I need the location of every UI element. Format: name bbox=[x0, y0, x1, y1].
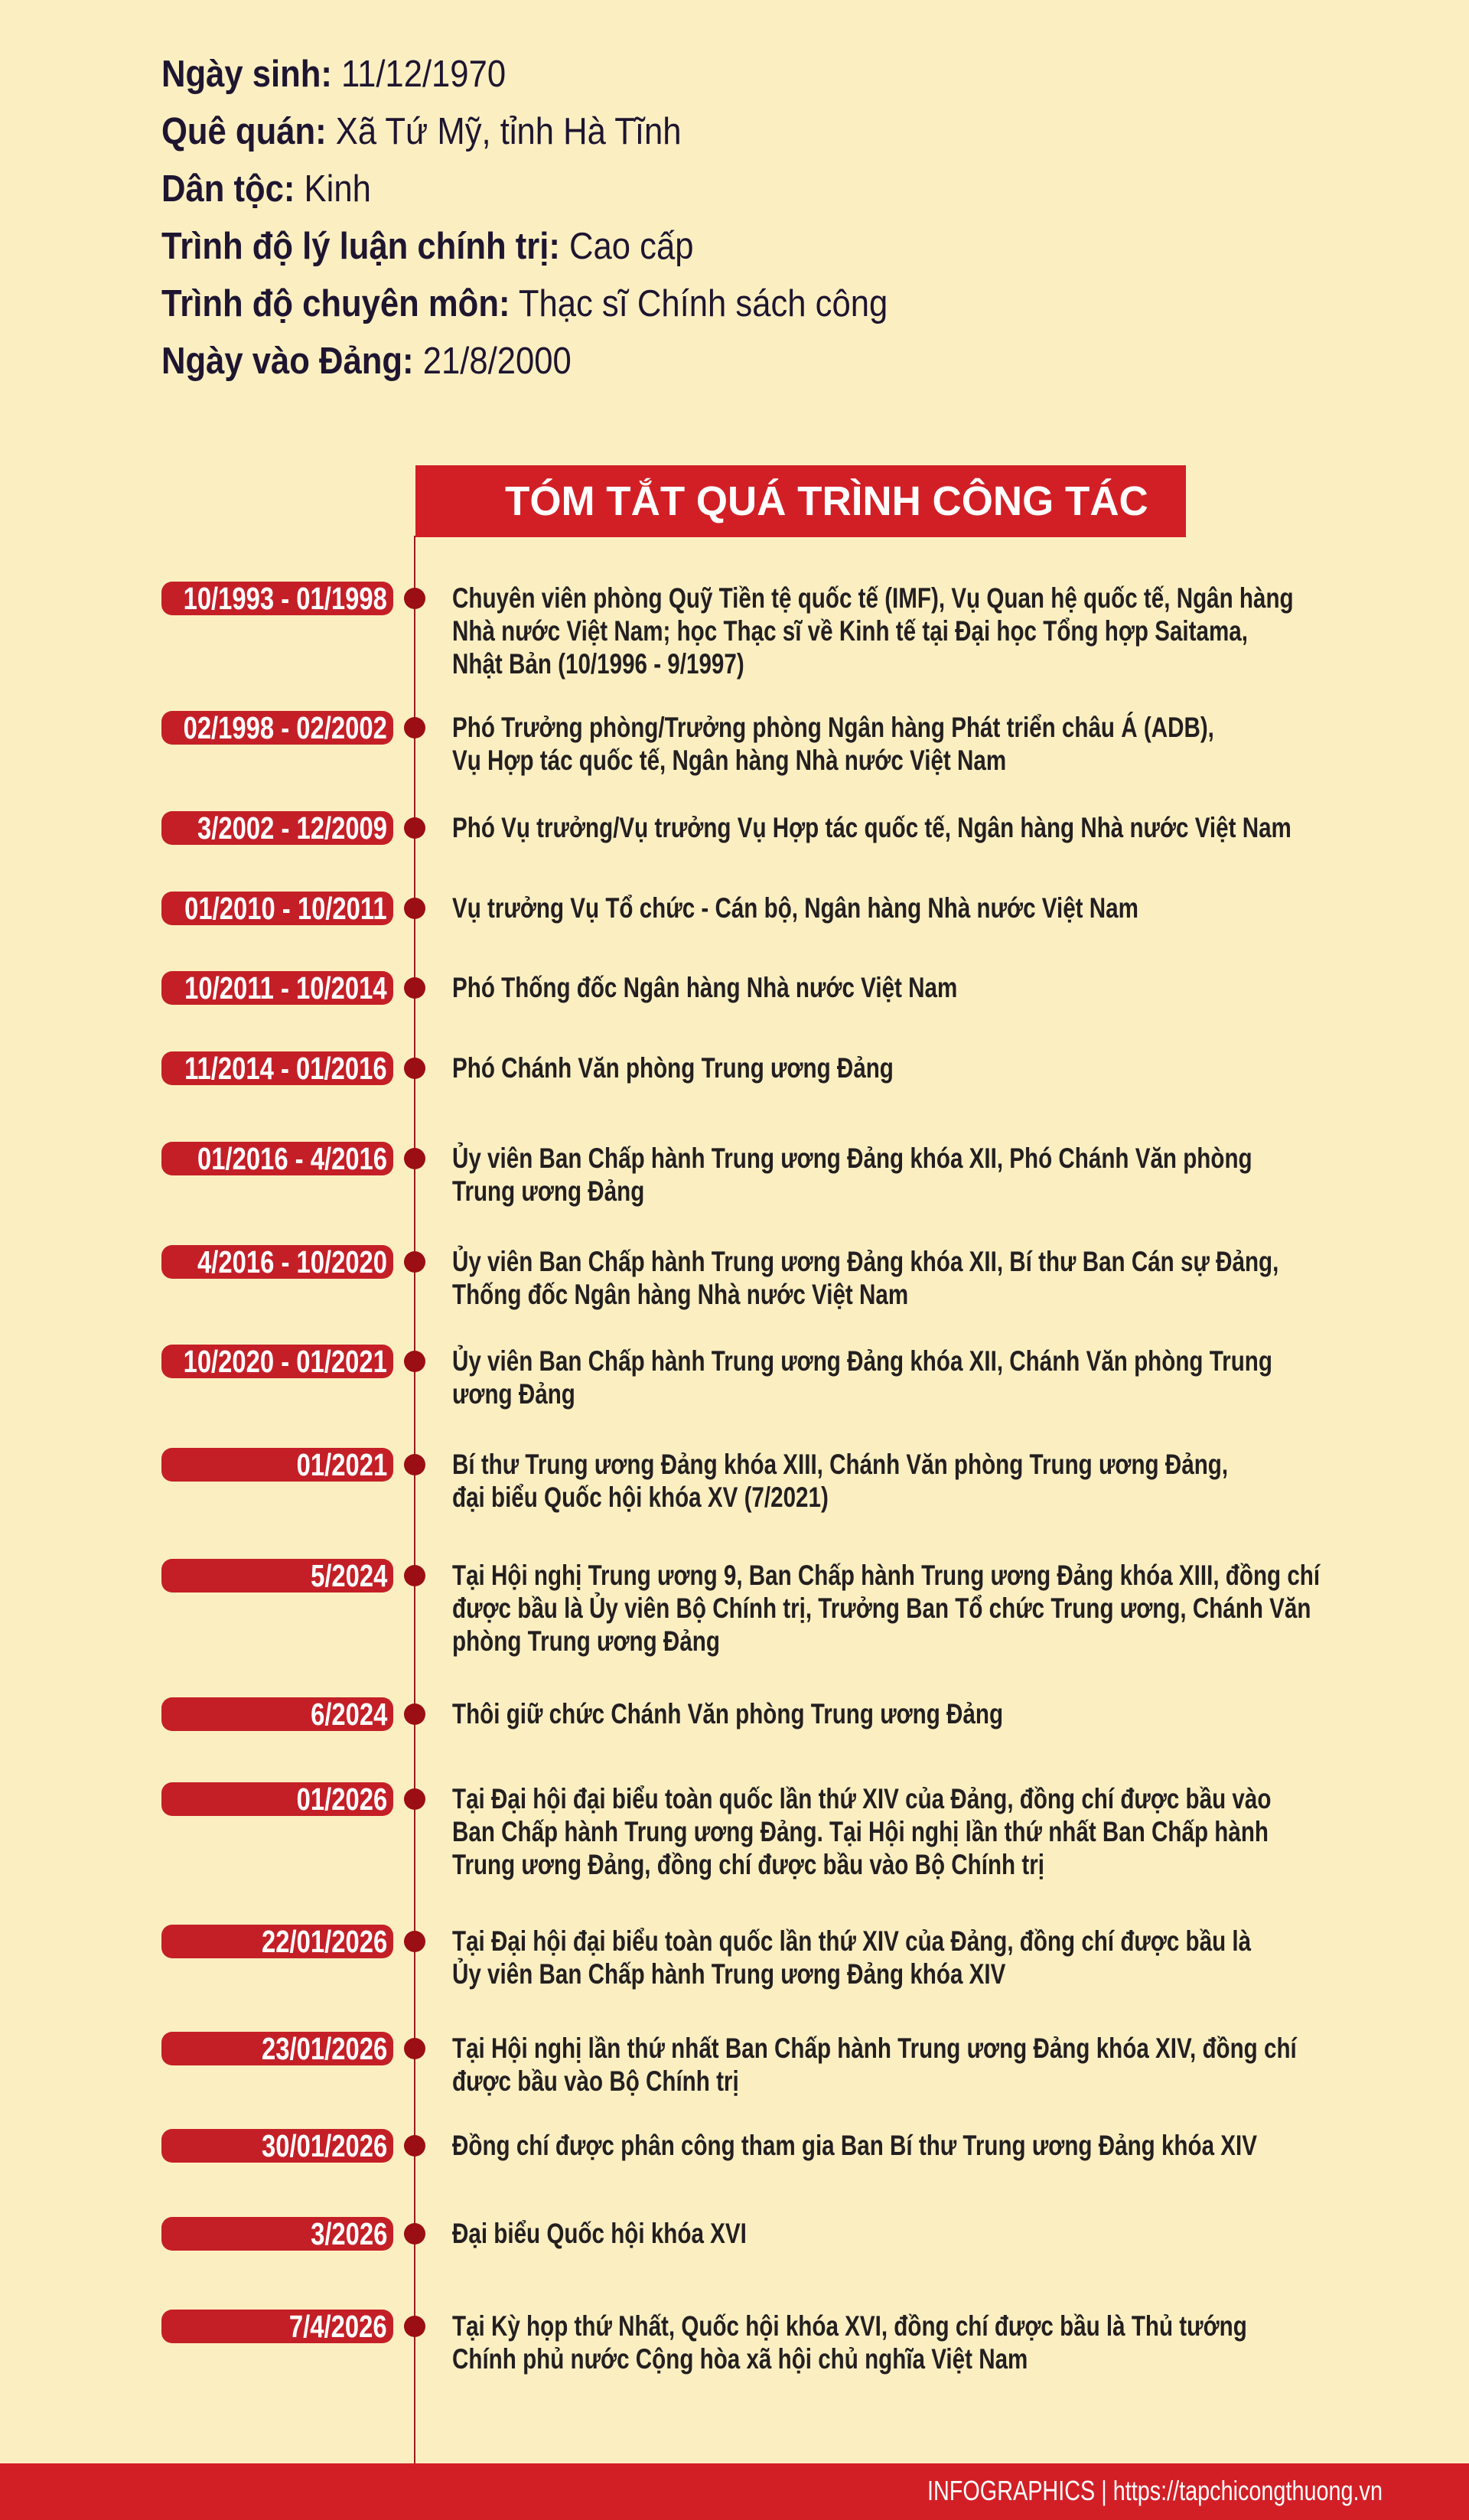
date pill bbox=[161, 1559, 393, 1593]
description: Ủy viên Ban Chấp hành Trung ương Đảng khóa XII, Chánh Văn phòng Trung bbox=[452, 1345, 1272, 1377]
entry 14 bbox=[161, 1925, 1252, 1990]
description: Trung ương Đảng, đồng chí được bầu vào Bộ Chính trị bbox=[452, 1849, 1044, 1880]
dot bbox=[404, 898, 425, 919]
dot bbox=[404, 1565, 425, 1586]
dot bbox=[404, 977, 425, 999]
description bbox=[452, 582, 1294, 680]
entry 3 bbox=[161, 811, 1291, 845]
entry 11 bbox=[161, 1559, 1321, 1657]
description: Nhà nước Việt Nam; học Thạc sĩ về Kinh tế tại Đại học Tổng hợp Saitama, bbox=[452, 615, 1248, 647]
dot bbox=[404, 1148, 425, 1169]
description: được bầu vào Bộ Chính trị bbox=[452, 2065, 739, 2097]
dot bbox=[404, 1058, 425, 1079]
description: Ủy viên Ban Chấp hành Trung ương Đảng khóa XII, Phó Chánh Văn phòng bbox=[452, 1143, 1252, 1174]
dot bbox=[404, 2316, 425, 2337]
description: được bầu là Ủy viên Bộ Chính trị, Trưởng Ban Tổ chức Trung ương, Chánh Văn bbox=[452, 1593, 1311, 1624]
info: birth date: Ngày sinh: 11/12/1970 bbox=[161, 54, 506, 95]
title banner: TÓM TẮT QUÁ TRÌNH CÔNG TÁC bbox=[505, 478, 1148, 524]
description bbox=[452, 1449, 1228, 1513]
description: đại biểu Quốc hội khóa XV (7/2021) bbox=[452, 1482, 829, 1513]
entry 7 bbox=[161, 1142, 1252, 1207]
description: Phó Vụ trưởng/Vụ trưởng Vụ Hợp tác quốc tế, Ngân hàng Nhà nước Việt Nam bbox=[452, 812, 1291, 843]
date pill bbox=[161, 2129, 393, 2163]
description: Phó Thống đốc Ngân hàng Nhà nước Việt Nam bbox=[452, 972, 957, 1003]
entry 17 bbox=[161, 2217, 747, 2251]
date pill bbox=[161, 1697, 393, 1731]
date pill bbox=[161, 1925, 393, 1958]
info: party join date: Ngày vào Đảng: 21/8/2000 bbox=[161, 341, 572, 382]
description: Đồng chí được phân công tham gia Ban Bí thư Trung ương Đảng khóa XIV bbox=[452, 2130, 1257, 2161]
entry 15 bbox=[161, 2032, 1298, 2097]
description: Nhật Bản (10/1996 - 9/1997) bbox=[452, 648, 744, 680]
entry 13 bbox=[161, 1782, 1271, 1880]
description: Đại biểu Quốc hội khóa XVI bbox=[452, 2218, 747, 2249]
dot bbox=[404, 2038, 425, 2059]
dot bbox=[404, 717, 425, 738]
timeline vertical line bbox=[414, 536, 415, 2464]
description bbox=[452, 1142, 1252, 1207]
info: ethnicity: Dân tộc: Kinh bbox=[161, 168, 371, 210]
entry 9 bbox=[161, 1345, 1272, 1410]
info: hometown: Quê quán: Xã Tứ Mỹ, tỉnh Hà Tĩnh bbox=[161, 111, 682, 152]
date pill bbox=[161, 1782, 393, 1816]
description: Tại Hội nghị lần thứ nhất Ban Chấp hành Trung ương Đảng khóa XIV, đồng chí bbox=[452, 2033, 1297, 2064]
description: Vụ trưởng Vụ Tổ chức - Cán bộ, Ngân hàng Nhà nước Việt Nam bbox=[452, 892, 1138, 924]
description bbox=[452, 1560, 1321, 1657]
entry 6 bbox=[161, 1051, 894, 1085]
dot bbox=[404, 817, 425, 839]
description bbox=[452, 1246, 1278, 1310]
description: Thôi giữ chức Chánh Văn phòng Trung ương Đảng bbox=[452, 1698, 1003, 1729]
date pill bbox=[161, 2217, 393, 2251]
description: Thống đốc Ngân hàng Nhà nước Việt Nam bbox=[452, 1279, 908, 1310]
description: Tại Đại hội đại biểu toàn quốc lần thứ XIV của Đảng, đồng chí được bầu là bbox=[452, 1925, 1251, 1957]
description: Ủy viên Ban Chấp hành Trung ương Đảng khóa XIV bbox=[452, 1958, 1005, 1990]
description: Tại Đại hội đại biểu toàn quốc lần thứ XIV của Đảng, đồng chí được bầu vào bbox=[452, 1783, 1271, 1814]
dot bbox=[404, 1931, 425, 1952]
description bbox=[452, 1925, 1252, 1990]
dot bbox=[404, 1454, 425, 1475]
description: Chính phủ nước Cộng hòa xã hội chủ nghĩa Việt Nam bbox=[452, 2343, 1028, 2375]
entry 12 bbox=[161, 1697, 1003, 1731]
entry 8 bbox=[161, 1245, 1278, 1310]
description: Ủy viên Ban Chấp hành Trung ương Đảng khóa XII, Bí thư Ban Cán sự Đảng, bbox=[452, 1246, 1278, 1277]
description bbox=[452, 1783, 1271, 1880]
description bbox=[452, 2033, 1298, 2097]
description bbox=[452, 712, 1214, 776]
date pill bbox=[161, 1448, 393, 1482]
description bbox=[452, 1345, 1272, 1410]
dot bbox=[404, 1251, 425, 1273]
description: Tại Hội nghị Trung ương 9, Ban Chấp hành Trung ương Đảng khóa XIII, đồng chí bbox=[452, 1560, 1320, 1591]
info: political theory level: Trình độ lý luận chính trị: Cao cấp bbox=[161, 226, 693, 267]
title banner bbox=[415, 465, 1186, 537]
entry 1 bbox=[161, 582, 1294, 680]
description: Chuyên viên phòng Quỹ Tiền tệ quốc tế (IMF), Vụ Quan hệ quốc tế, Ngân hàng bbox=[452, 582, 1294, 614]
description: Phó Trưởng phòng/Trưởng phòng Ngân hàng Phát triển châu Á (ADB), bbox=[452, 712, 1214, 743]
entry 4 bbox=[161, 892, 1138, 925]
entry 10 bbox=[161, 1448, 1228, 1513]
description: Trung ương Đảng bbox=[452, 1175, 644, 1207]
date pill bbox=[161, 2032, 393, 2065]
description: phòng Trung ương Đảng bbox=[452, 1625, 720, 1657]
footer credit text: INFOGRAPHICS | https://tapchicongthuong.vn bbox=[927, 2475, 1383, 2506]
dot bbox=[404, 1703, 425, 1725]
dot bbox=[404, 588, 425, 609]
date pill bbox=[161, 2310, 393, 2343]
description: Vụ Hợp tác quốc tế, Ngân hàng Nhà nước Việt Nam bbox=[452, 745, 1006, 776]
dot bbox=[404, 1351, 425, 1372]
info: professional level: Trình độ chuyên môn: Thạc sĩ Chính sách công bbox=[161, 283, 888, 324]
dot bbox=[404, 1788, 425, 1810]
description: ương Đảng bbox=[452, 1378, 575, 1410]
description bbox=[452, 2310, 1247, 2375]
dot bbox=[404, 2135, 425, 2157]
footer bar bbox=[0, 2463, 1469, 2520]
entry 18 bbox=[161, 2310, 1247, 2375]
entry 5 bbox=[161, 971, 957, 1005]
description: Phó Chánh Văn phòng Trung ương Đảng bbox=[452, 1052, 894, 1084]
entry 16 bbox=[161, 2129, 1257, 2163]
description: Tại Kỳ họp thứ Nhất, Quốc hội khóa XVI, đồng chí được bầu là Thủ tướng bbox=[452, 2310, 1247, 2342]
description: Bí thư Trung ương Đảng khóa XIII, Chánh Văn phòng Trung ương Đảng, bbox=[452, 1449, 1228, 1480]
description: Ban Chấp hành Trung ương Đảng. Tại Hội nghị lần thứ nhất Ban Chấp hành bbox=[452, 1816, 1269, 1847]
entry 2 bbox=[161, 711, 1214, 776]
dot bbox=[404, 2223, 425, 2245]
